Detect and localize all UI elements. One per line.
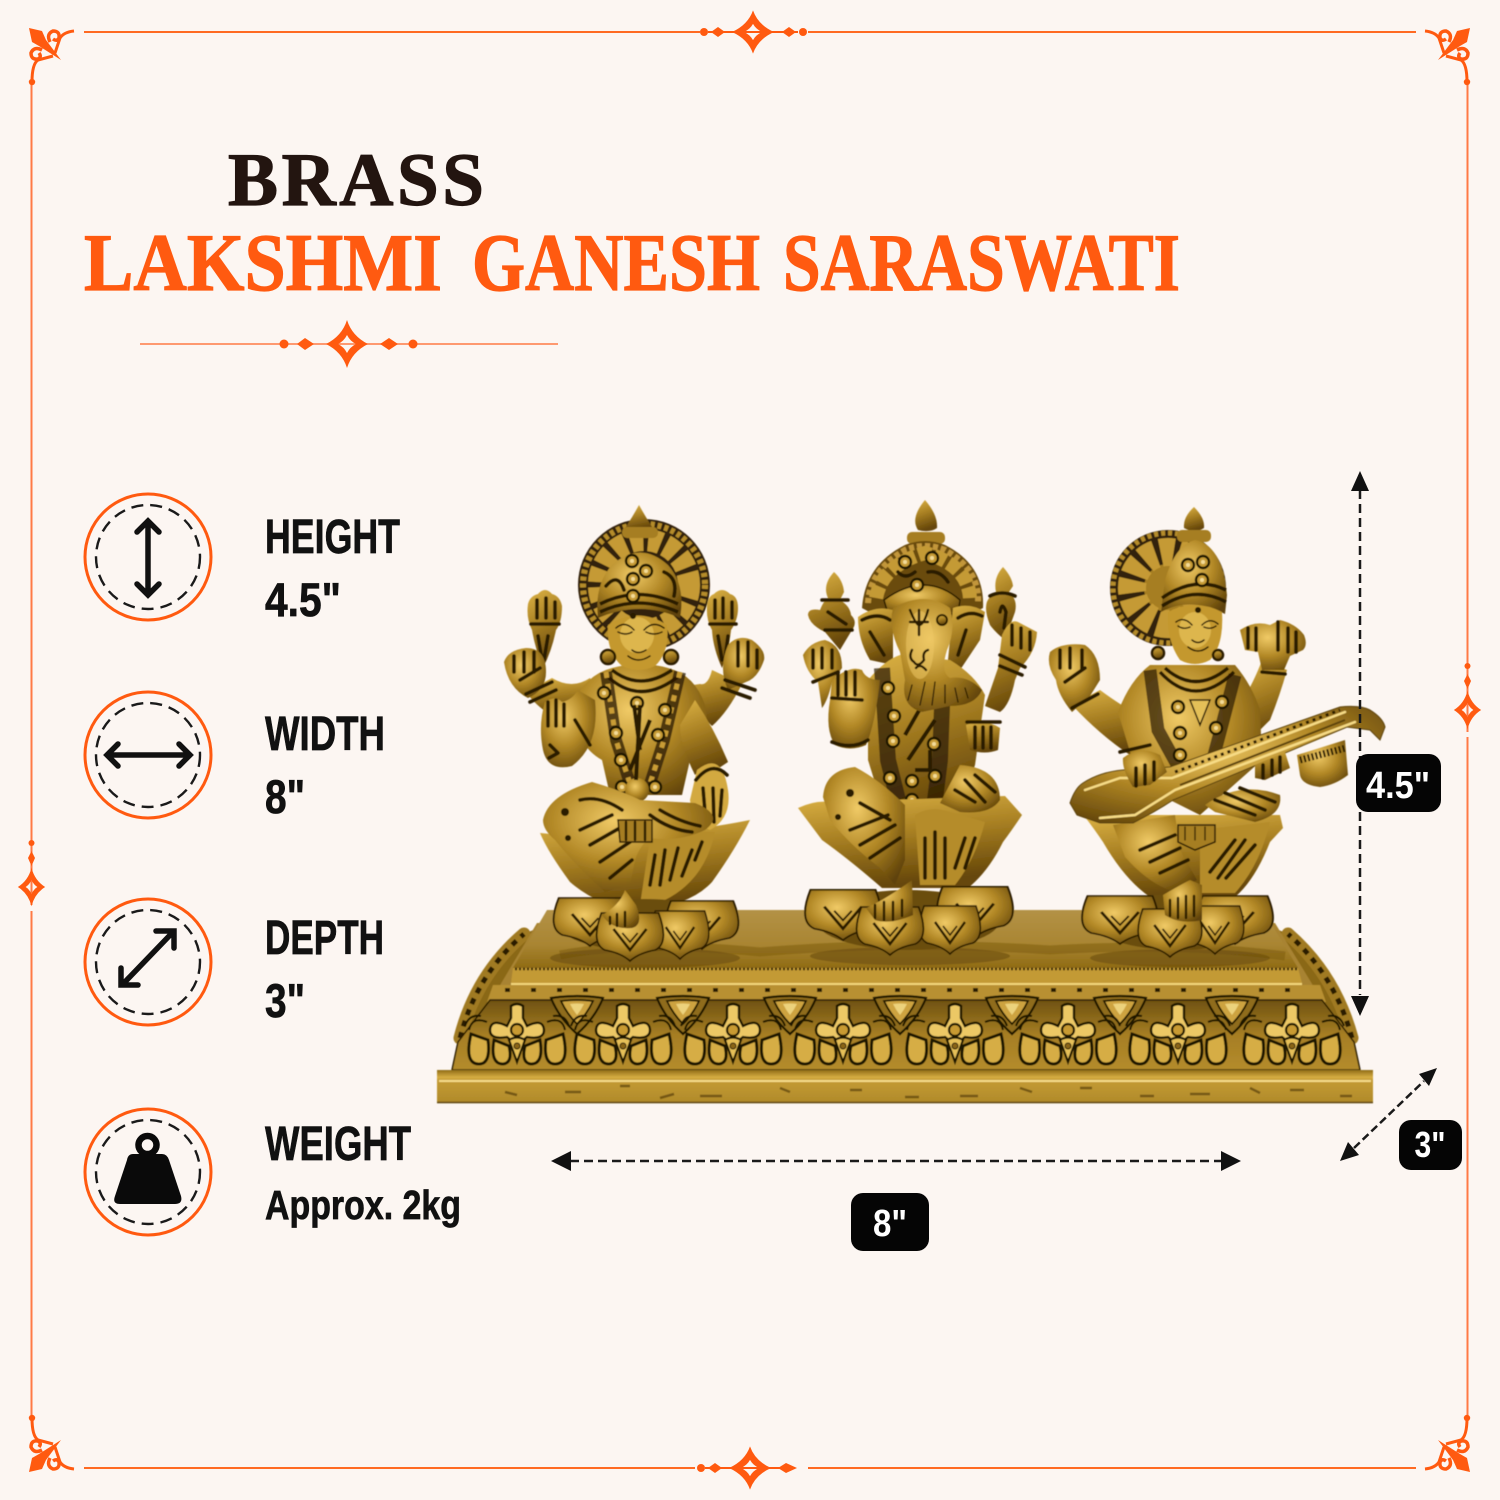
tag: 3 in: 3" (1414, 1124, 1446, 1165)
front right arm (680, 700, 728, 775)
face (1168, 605, 1222, 664)
finial (1184, 507, 1204, 531)
icon: corner ornament top left (29, 28, 74, 85)
finial (915, 500, 937, 531)
foot (1163, 880, 1202, 922)
front right hand (966, 722, 1000, 752)
crown (597, 552, 682, 618)
foot (866, 880, 913, 922)
foot (602, 890, 639, 928)
back arms (1072, 690, 1150, 755)
necklace band (882, 668, 943, 800)
frieze motifs (465, 996, 1344, 1064)
left bud (528, 590, 562, 668)
torso (1118, 665, 1262, 815)
veena (1070, 706, 1385, 823)
crown (862, 541, 983, 625)
crossed legs (1113, 815, 1197, 892)
label: width: WIDTH (265, 708, 385, 761)
lotus seat (1085, 815, 1283, 897)
torso (868, 655, 985, 815)
heading: product name: SARASWATI (783, 217, 1180, 308)
heading: product name (84, 217, 1180, 308)
value: width: 8" (265, 770, 305, 823)
crossed legs (543, 782, 713, 892)
spec: depth (85, 899, 384, 1027)
dimension: height (1351, 471, 1441, 1016)
tag: 8 in: 8" (873, 1203, 907, 1245)
statue: Ganesh (798, 500, 1037, 965)
heading: product name: GANESH (472, 217, 760, 308)
base lotus (1093, 894, 1263, 950)
front left hand (828, 669, 880, 748)
tag: 8 in (851, 1193, 929, 1251)
ears (858, 609, 893, 665)
torso (572, 664, 707, 795)
icon: corner ornament bottom right (1425, 1415, 1470, 1472)
heading: brass: BRASS (228, 139, 484, 222)
spec: weight (85, 1109, 461, 1235)
head & trunk (892, 599, 982, 712)
necklaces (1160, 668, 1234, 691)
base lotus (560, 899, 730, 951)
halo (1110, 530, 1226, 646)
necklaces (606, 670, 680, 692)
face (608, 616, 668, 670)
heading: product name: LAKSHMI (84, 217, 442, 308)
crown (1161, 540, 1227, 614)
title divider ornament (140, 320, 558, 368)
statue: Lakshmi (504, 505, 764, 968)
icon: right side ornament (1454, 663, 1481, 729)
title (84, 139, 1180, 308)
halo (578, 519, 710, 651)
dimension: depth (1340, 1068, 1462, 1170)
back arms (526, 678, 600, 716)
lotus seat (540, 820, 750, 910)
icon: corner ornament top right (1425, 28, 1470, 85)
icon: height arrow (85, 494, 211, 620)
tag: 4.5 in: 4.5" (1366, 765, 1430, 807)
brass statue (437, 500, 1385, 1103)
back hands & arms (803, 640, 842, 708)
back hands (1049, 644, 1100, 712)
label: weight: WEIGHT (265, 1118, 411, 1171)
finial (624, 505, 654, 530)
tag: 4.5 in (1356, 754, 1441, 812)
icon: top centre ornament (700, 10, 807, 54)
icon: weight (85, 1109, 211, 1235)
icon: width arrow (85, 692, 211, 818)
statue: Saraswati (1049, 507, 1385, 967)
back hands (504, 648, 546, 698)
spec: width (85, 692, 385, 823)
dimension: width (551, 1151, 1241, 1251)
right bud (707, 590, 738, 668)
icon: left side ornament (18, 840, 45, 906)
base lotus (816, 890, 1000, 950)
icon: depth arrow (85, 899, 211, 1025)
value: weight: Approx. 2kg (265, 1182, 461, 1228)
label: height: HEIGHT (265, 511, 400, 564)
icon: bottom centre ornament (697, 1446, 797, 1490)
side shells (808, 572, 855, 650)
label: depth: DEPTH (265, 912, 384, 965)
value: depth: 3" (265, 974, 305, 1027)
icon: corner ornament bottom left (29, 1415, 74, 1472)
lotus seat (798, 796, 1022, 888)
statue base platform (437, 910, 1373, 1103)
veena hands (1123, 751, 1167, 787)
crossed legs (823, 767, 905, 885)
value: height: 4.5" (265, 573, 341, 626)
spec: height (85, 494, 400, 626)
front left arm (541, 690, 596, 767)
veena gourd (1297, 740, 1348, 787)
